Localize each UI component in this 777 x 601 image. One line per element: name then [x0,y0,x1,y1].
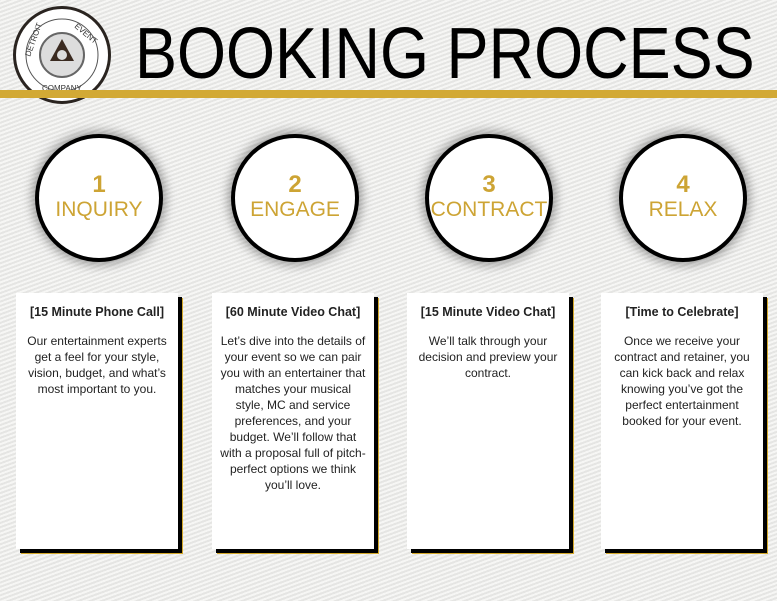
circle 4 [619,134,747,262]
card 3: [15 Minute Video Chat] [421,305,555,319]
circle 3: CONTRACT [431,198,547,221]
circle 2: 2 [288,171,302,198]
card 3: We’ll talk through your decision and preview your contract. [419,334,557,380]
circle 3: 3 [482,171,496,198]
card 4 [601,293,763,549]
card 3 [407,293,569,549]
card 2: Let’s dive into the details of your event so we can pair you with an entertainer that matches your musical style, MC and service preferences, and your budget. We’ll follow that with a proposal full of pitch-perfect options we think you’ll love. [220,334,366,492]
card 4: [Time to Celebrate] [626,305,738,319]
card 2: [60 Minute Video Chat] [226,305,360,319]
logo [13,6,111,104]
card 4: Once we receive your contract and retainer, you can kick back and relax knowing you’ve got the perfect entertainment booked for your event. [614,334,750,428]
title: BOOKING PROCESS [135,14,755,94]
circle 1: 1 [92,171,106,198]
circle 1 [35,134,163,262]
card 1: Our entertainment experts get a feel for your style, vision, budget, and what’s most important to you. [27,334,167,396]
card 2 [212,293,374,549]
circle 4: RELAX [649,198,717,221]
circle 4: 4 [676,171,690,198]
circle 2 [231,134,359,262]
card 1: [15 Minute Phone Call] [30,305,164,319]
logo: DETROIT [23,22,44,58]
circle 1: INQUIRY [55,198,143,221]
logo: COMPANY [42,84,83,93]
gold rule [0,90,777,98]
card 1 [16,293,178,549]
circle 2: ENGAGE [250,198,340,221]
circle 3 [425,134,553,262]
logo: EVENT [73,22,99,46]
